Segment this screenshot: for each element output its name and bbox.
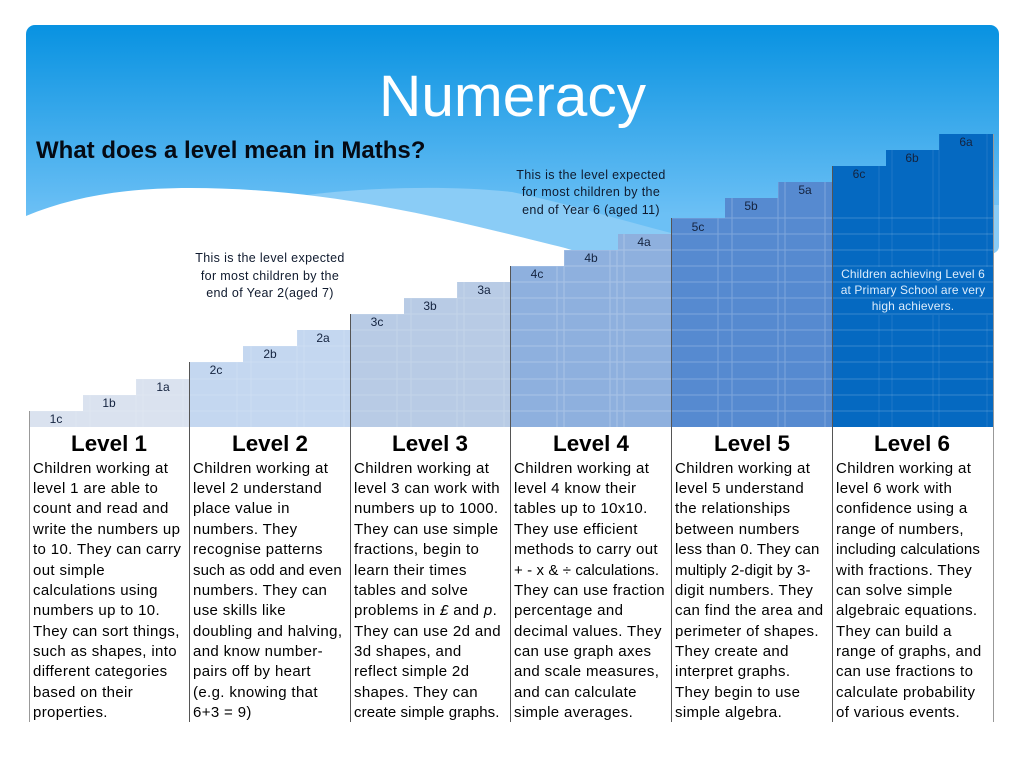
- level 2 steps: 2c: [210, 363, 222, 377]
- text: level 1 description: They can sort things,: [33, 623, 180, 640]
- text: level 6 description: algebraic equations.: [836, 602, 977, 619]
- callout: level 6 high achievers: [841, 267, 986, 313]
- text: level 4 description: percentage and: [514, 602, 623, 619]
- text: level 5 description: between numbers: [675, 521, 800, 538]
- level 5 steps: 5a: [798, 183, 812, 197]
- staircase chart: [30, 134, 993, 427]
- text: level 5 description: simple algebra.: [675, 704, 782, 721]
- callout: year 2 expectation: This is the level expected: [195, 251, 345, 265]
- text: level 2 description: 6+3 = 9): [193, 704, 252, 721]
- text: level 1 description: Children working at: [33, 460, 168, 477]
- text: level 4 description: + - x & ÷ calculations.: [514, 562, 659, 579]
- text: level 3 description: learn their times: [354, 562, 467, 579]
- text: level 3 description: [354, 460, 501, 721]
- callout: year 6 expectation: end of Year 6 (aged 11): [522, 202, 660, 216]
- text: level 3 description: numbers up to 1000.: [354, 500, 498, 517]
- text: level 6 description: can use fractions to: [836, 663, 973, 680]
- text: level 1 description: level 1 are able to: [33, 480, 158, 497]
- text: level 4 description: They can use fraction: [514, 582, 665, 599]
- text: level 2 description: use skills like: [193, 602, 286, 619]
- text: level 4 description: decimal values. They: [514, 623, 662, 640]
- heading: level 2: Level 2: [232, 431, 308, 456]
- level 1 steps: 1c: [50, 412, 62, 426]
- text: level 5 description: the relationships: [675, 500, 790, 517]
- text: level 2 description: recognise patterns: [193, 541, 323, 558]
- text: level 3 description: reflect simple 2d: [354, 663, 469, 680]
- text: level 1 description: properties.: [33, 704, 108, 721]
- text: level 1 description: such as shapes, into: [33, 643, 177, 660]
- text: level 1 description: different categories: [33, 663, 168, 680]
- text: level 1 description: to 10. They can carry: [33, 541, 181, 558]
- text: level 5 description: digit numbers. They: [675, 582, 813, 599]
- level 2 steps: 2b: [263, 347, 277, 361]
- text: level 4 description: tables up to 10x10.: [514, 500, 648, 517]
- level 1 steps: 1b: [102, 396, 116, 410]
- text: level 4 description: [514, 460, 665, 721]
- text: level 6 description: including calculations: [836, 541, 980, 558]
- callout: level 6 high achievers: at Primary School are very: [841, 283, 985, 297]
- text: level 6 description: of various events.: [836, 704, 960, 721]
- text: level 6 description: They can build a: [836, 623, 952, 640]
- callout: year 2 expectation: [195, 251, 345, 300]
- text: level 3 description: They can use simple: [354, 521, 498, 538]
- text: level 3 description: tables and solve: [354, 582, 468, 599]
- text: level 3 description: 3d shapes, and: [354, 643, 462, 660]
- callout: level 6 high achievers: high achievers.: [872, 299, 954, 313]
- text: level 4 description: methods to carry out: [514, 541, 658, 558]
- text: level 3 description: fractions, begin to: [354, 541, 479, 558]
- text: level 2 description: pairs off by heart: [193, 663, 311, 680]
- heading: level 4: Level 4: [553, 431, 629, 456]
- text: level 6 description: range of graphs, and: [836, 643, 982, 660]
- heading: level 5: Level 5: [714, 431, 790, 456]
- text: level 4 description: simple averages.: [514, 704, 633, 721]
- text: level 6 description: level 6 work with: [836, 480, 952, 497]
- level 6 steps: 6b: [905, 151, 919, 165]
- text: level 6 description: can solve simple: [836, 582, 953, 599]
- text: level 1 description: [33, 460, 181, 721]
- callout: level 6 high achievers: Children achieving Level 6: [841, 267, 985, 281]
- text: level 3 description: level 3 can work with: [354, 480, 500, 497]
- level 3 steps: 3b: [423, 299, 437, 313]
- title: Numeracy: [379, 64, 646, 129]
- text: level 2 description: level 2 understand: [193, 480, 322, 497]
- text: level 4 description: and scale measures,: [514, 663, 659, 680]
- text: level 6 description: Children working at: [836, 460, 971, 477]
- text: level 4 description: and can calculate: [514, 684, 637, 701]
- callout: year 6 expectation: This is the level expected: [516, 168, 666, 182]
- level 1 steps: [30, 379, 189, 427]
- level 1 steps: 1a: [156, 380, 170, 394]
- text: level 4 description: level 4 know their: [514, 480, 636, 497]
- text: level 2 description: and know number-: [193, 643, 323, 660]
- level 6 steps: 6a: [959, 135, 973, 149]
- text: level 2 description: [193, 460, 342, 721]
- text: level 4 description: Children working at: [514, 460, 649, 477]
- text: level 3 description: problems in £ and p.: [354, 602, 497, 619]
- heading: level 1: Level 1: [71, 431, 147, 456]
- text: level 6 description: [836, 460, 982, 721]
- level 2 steps: 2a: [316, 331, 330, 345]
- level 5 steps: 5c: [692, 220, 704, 234]
- text: level 5 description: They create and: [675, 643, 789, 660]
- text: level 6 description: confidence using a: [836, 500, 968, 517]
- text: level 1 description: numbers up to 10.: [33, 602, 160, 619]
- text: level 6 description: with fractions. They: [836, 562, 972, 579]
- text: level 4 description: They use efficient: [514, 521, 638, 538]
- level 4 steps: 4b: [584, 251, 598, 265]
- text: level 4 description: can use graph axes: [514, 643, 651, 660]
- text: level 1 description: calculations using: [33, 582, 158, 599]
- subtitle: What does a level mean in Maths?: [36, 137, 425, 164]
- level 5 steps: [671, 180, 832, 427]
- callout: year 6 expectation: [516, 168, 666, 216]
- text: level 5 description: perimeter of shapes.: [675, 623, 819, 640]
- text: level 2 description: (e.g. knowing that: [193, 684, 318, 701]
- level 5 steps: 5b: [744, 199, 758, 213]
- level 4 steps: 4c: [531, 267, 543, 281]
- text: level 2 description: numbers. They: [193, 521, 297, 538]
- callout: year 2 expectation: for most children by the: [201, 268, 339, 282]
- text: level 5 description: [675, 460, 824, 721]
- text: level 3 description: They can use 2d and: [354, 623, 501, 640]
- text: level 3 description: Children working at: [354, 460, 489, 477]
- text: level 1 description: out simple: [33, 562, 105, 579]
- level 2 steps: [190, 320, 350, 427]
- level 3 steps: 3c: [371, 315, 383, 329]
- text: level 3 description: create simple graphs.: [354, 704, 500, 721]
- text: level 5 description: can find the area and: [675, 602, 824, 619]
- text: level 5 description: Children working at: [675, 460, 810, 477]
- heading: level 3: Level 3: [392, 431, 468, 456]
- level 4 steps: 4a: [637, 235, 651, 249]
- text: level 1 description: write the numbers up: [33, 521, 180, 538]
- text: level 3 description: shapes. They can: [354, 684, 478, 701]
- text: level 5 description: They begin to use: [675, 684, 800, 701]
- text: level 5 description: multiply 2-digit by 3-: [675, 562, 811, 579]
- level 3 steps: [350, 270, 511, 427]
- level 6 steps: [832, 130, 994, 427]
- text: level 5 description: level 5 understand: [675, 480, 804, 497]
- text: level 2 description: doubling and halving,: [193, 623, 342, 640]
- heading: level 6: Level 6: [874, 431, 950, 456]
- text: level 5 description: less than 0. They can: [675, 541, 819, 558]
- text: level 6 description: range of numbers,: [836, 521, 964, 538]
- text: level 2 description: place value in: [193, 500, 290, 517]
- text: level 6 description: calculate probability: [836, 684, 975, 701]
- text: level 1 description: based on their: [33, 684, 133, 701]
- level 4 steps: [511, 230, 671, 427]
- text: level 2 description: such as odd and even: [193, 562, 342, 579]
- level 3 steps: 3a: [477, 283, 491, 297]
- callout: year 2 expectation: end of Year 2(aged 7): [206, 286, 334, 300]
- text: level 2 description: Children working at: [193, 460, 328, 477]
- text: level 2 description: numbers. They can: [193, 582, 327, 599]
- level 6 steps: 6c: [853, 167, 865, 181]
- callout: year 6 expectation: for most children by the: [522, 185, 660, 199]
- text: level 5 description: interpret graphs.: [675, 663, 790, 680]
- text: level 1 description: count and read and: [33, 500, 169, 517]
